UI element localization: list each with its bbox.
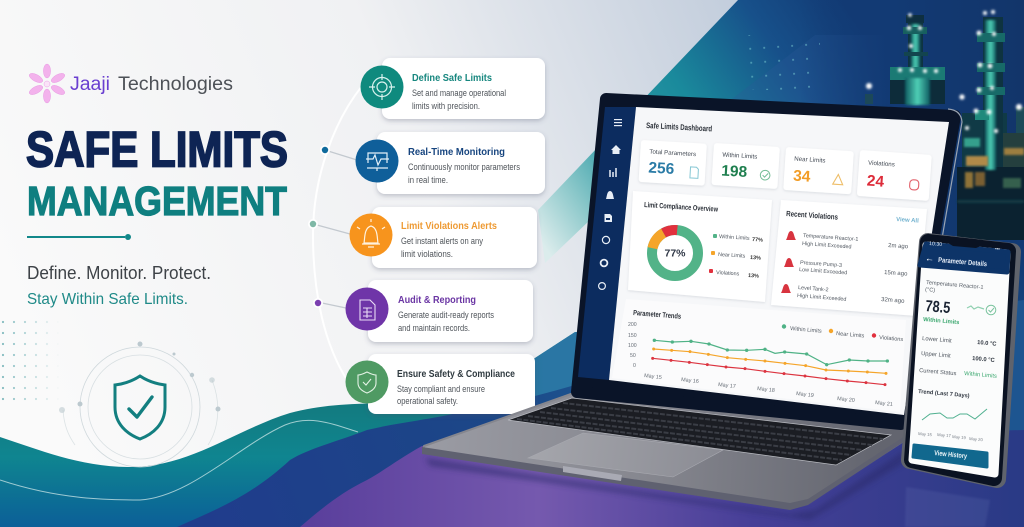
title: MANAGEMENT — [27, 178, 287, 224]
panel: real-time monitoring — [356, 132, 545, 194]
title — [26, 122, 288, 224]
x axis labels: May 16 — [681, 377, 699, 385]
parameter summary — [923, 280, 996, 326]
panel: real-time monitoring: Continuously monitor parameters — [408, 162, 521, 172]
panel: real-time monitoring: Real-Time Monitoring — [408, 146, 505, 158]
mini trend chart: May 15 — [918, 431, 933, 437]
laptop — [422, 99, 962, 510]
view history button — [913, 445, 987, 467]
icon: shield check — [346, 360, 388, 404]
laptop shadow on table — [425, 450, 905, 520]
wave highlight line — [0, 420, 358, 500]
parameter summary: (°C) — [925, 287, 935, 294]
phone header — [920, 244, 1008, 272]
background: lighter diagonal band — [640, 35, 1024, 200]
violation row 1 — [786, 231, 909, 250]
tagline — [27, 263, 211, 308]
kpi card: total parameters: 256 — [648, 159, 675, 178]
kpi card: violations — [857, 150, 932, 201]
limits table: 100.0 °C — [972, 356, 996, 364]
violation row 3 — [781, 284, 905, 305]
panel: parameter trends: Parameter Trends — [633, 308, 681, 321]
mini trend chart: May 17 — [937, 432, 952, 438]
kpi card: within limits — [711, 143, 780, 189]
panel: audit and reporting — [346, 280, 533, 342]
violation row 3: Level Tank-2 — [798, 285, 829, 293]
x axis labels: May 17 — [718, 382, 736, 390]
kpi card: violations: 24 — [866, 173, 885, 191]
title underline — [27, 234, 131, 240]
panel: define safe limits: Define Safe Limits — [412, 72, 492, 84]
trackpad — [528, 433, 723, 477]
panel: ensure safety and compliance — [346, 354, 535, 414]
panel: audit and reporting: Audit & Reporting — [398, 294, 476, 306]
y axis labels: 200 — [628, 322, 637, 328]
icon: monitor pulse — [356, 140, 398, 182]
donut legend: Near Limits — [718, 252, 746, 260]
notch — [947, 236, 983, 248]
violation row 1: Temperature Reactor-1 — [803, 233, 859, 243]
panel: limit violations alerts: Limit Violations Alerts — [401, 220, 497, 232]
panel: define safe limits: limits with precision. — [412, 101, 480, 111]
view history button: View History — [934, 450, 967, 460]
icon: flower — [28, 64, 66, 103]
mini trend chart: Trend (Last 7 Days) — [918, 389, 970, 400]
icon: shield with orbit rings — [59, 342, 220, 467]
kpi card: near limits: 34 — [793, 168, 811, 186]
panel: ensure safety and compliance: Ensure Safety & Compliance — [397, 368, 515, 380]
y axis labels: 0 — [633, 363, 636, 369]
parameter summary: 78.5 — [925, 298, 951, 317]
x axis labels: May 18 — [757, 386, 775, 394]
kpi card: total parameters: Total Parameters — [649, 149, 696, 158]
parameter summary: Temperature Reactor-1 — [926, 280, 984, 291]
donut legend: Violations — [716, 270, 740, 277]
panel: limit compliance overview: Limit Compliance Overview — [644, 200, 718, 214]
panel: define safe limits: Set and manage operational — [412, 88, 506, 98]
donut legend — [709, 234, 763, 280]
plant lights — [866, 10, 1022, 133]
x axis labels: May 20 — [837, 396, 855, 404]
kpi card: near limits — [783, 147, 854, 194]
tagline: Define. Monitor. Protect. — [27, 263, 211, 283]
background: night sky — [800, 0, 1024, 240]
status bar: 10:30 — [929, 241, 942, 248]
donut legend: 77% — [752, 237, 763, 244]
violation row 1: 2m ago — [888, 243, 909, 250]
kpi card: violations: Violations — [868, 160, 895, 168]
limits table: Upper Limit — [921, 351, 951, 360]
icon: target — [360, 66, 404, 108]
dashboard sidebar — [578, 107, 636, 380]
plant warm lights — [957, 138, 1024, 203]
y axis labels — [628, 322, 637, 369]
background: teal and navy diagonal panel — [538, 0, 1024, 330]
icon: alarm bell — [350, 214, 392, 256]
panel: recent violations — [771, 200, 927, 316]
violation row 2 — [784, 258, 908, 278]
violation row 2: Low Limit Exceeded — [799, 267, 847, 276]
kpi card: within limits: 198 — [721, 163, 748, 181]
bottom wave: teal — [0, 330, 1024, 527]
panel: ensure safety and compliance: operational safety. — [397, 396, 458, 406]
logo: Technologies — [118, 74, 233, 95]
kpi card: total parameters — [639, 140, 707, 186]
tabletop: purple — [300, 430, 1024, 527]
limits table: 10.0 °C — [977, 340, 997, 348]
logo — [28, 64, 233, 103]
limits table: Current Status — [919, 368, 957, 377]
y axis labels: 50 — [630, 353, 636, 359]
violation row 3: High Limit Exceeded — [797, 293, 847, 303]
y axis labels: 100 — [628, 343, 637, 349]
timeline arc — [308, 86, 362, 380]
keyboard — [508, 398, 891, 465]
phone: Parameter Details — [938, 257, 987, 268]
sidebar icons — [599, 119, 622, 289]
kpi card: near limits: Near Limits — [794, 156, 826, 165]
trend legend: Near Limits — [836, 331, 865, 339]
panel: recent violations: View All — [896, 217, 919, 225]
refinery at night — [865, 10, 1024, 240]
dotted pattern left — [2, 320, 48, 400]
tower one — [865, 15, 945, 105]
violation row 2: Pressure Pump-3 — [800, 260, 842, 269]
panel: parameter trends — [612, 299, 906, 412]
donut legend: Within Limits — [719, 234, 750, 242]
panel: real-time monitoring: in real time. — [408, 175, 448, 185]
bottom wave: blue — [177, 300, 1024, 527]
violation row 1: High Limit Exceeded — [802, 241, 852, 250]
bottom wave: teal-blue right portion — [420, 330, 700, 527]
lower dark plant — [957, 167, 1024, 240]
limits table: Within Limits — [964, 371, 997, 380]
panel: limit violations alerts — [350, 207, 537, 268]
trend legend: Violations — [879, 335, 904, 343]
phone reflection — [905, 487, 990, 527]
x axis labels: May 19 — [796, 391, 814, 399]
phone — [910, 236, 1012, 479]
laptop lid — [577, 99, 955, 424]
title: SAFE LIMITS — [26, 122, 288, 178]
panel: limit compliance overview: 77% — [664, 248, 686, 260]
trend legend: Within Limits — [790, 326, 822, 335]
x axis labels — [644, 373, 893, 408]
tagline: Stay Within Safe Limits. — [27, 291, 188, 308]
panel: ensure safety and compliance: Stay compliant and ensure — [397, 384, 485, 394]
parameter summary: Within Limits — [923, 317, 960, 326]
trend legend — [782, 324, 904, 343]
dashboard screen — [609, 107, 949, 415]
mini trend chart — [918, 389, 987, 442]
dashboard heading: Safe Limits Dashboard — [646, 121, 712, 133]
phone screen — [912, 245, 1007, 474]
phone: ▪▪▪ — [995, 246, 1001, 251]
y axis labels: 150 — [628, 333, 637, 339]
mini trend chart: May 20 — [969, 436, 984, 442]
panel: recent violations: Recent Violations — [786, 209, 838, 222]
donut legend: 13% — [750, 255, 761, 262]
front notch — [563, 466, 622, 481]
phone body — [910, 242, 1012, 479]
panel: limit compliance overview — [628, 191, 772, 302]
limits table — [919, 336, 997, 380]
violation row 2: 15m ago — [884, 270, 908, 278]
laptop base — [422, 394, 905, 510]
violation row 3: 32m ago — [881, 297, 905, 305]
icon: report document — [346, 288, 388, 330]
line chart — [651, 339, 889, 386]
x axis labels: May 15 — [644, 373, 662, 381]
x axis labels: May 21 — [875, 400, 893, 408]
logo text: Jaaji — [70, 74, 110, 95]
kpi card: within limits: Within Limits — [722, 152, 758, 161]
panel: audit and reporting: Generate audit-ready reports — [398, 310, 494, 320]
mini trend chart: May 19 — [952, 434, 967, 440]
limits table: Lower Limit — [922, 336, 952, 345]
panel: define safe limits — [360, 58, 545, 119]
panel: limit violations alerts: limit violations. — [401, 249, 453, 259]
phone header text: ← — [925, 253, 935, 264]
donut legend: 13% — [748, 273, 759, 280]
panel: audit and reporting: and maintain records. — [398, 323, 470, 333]
dotted texture upper right — [745, 35, 820, 90]
panel: limit violations alerts: Get instant alerts on any — [401, 236, 484, 246]
donut chart — [652, 230, 698, 276]
tower two — [975, 17, 1005, 170]
